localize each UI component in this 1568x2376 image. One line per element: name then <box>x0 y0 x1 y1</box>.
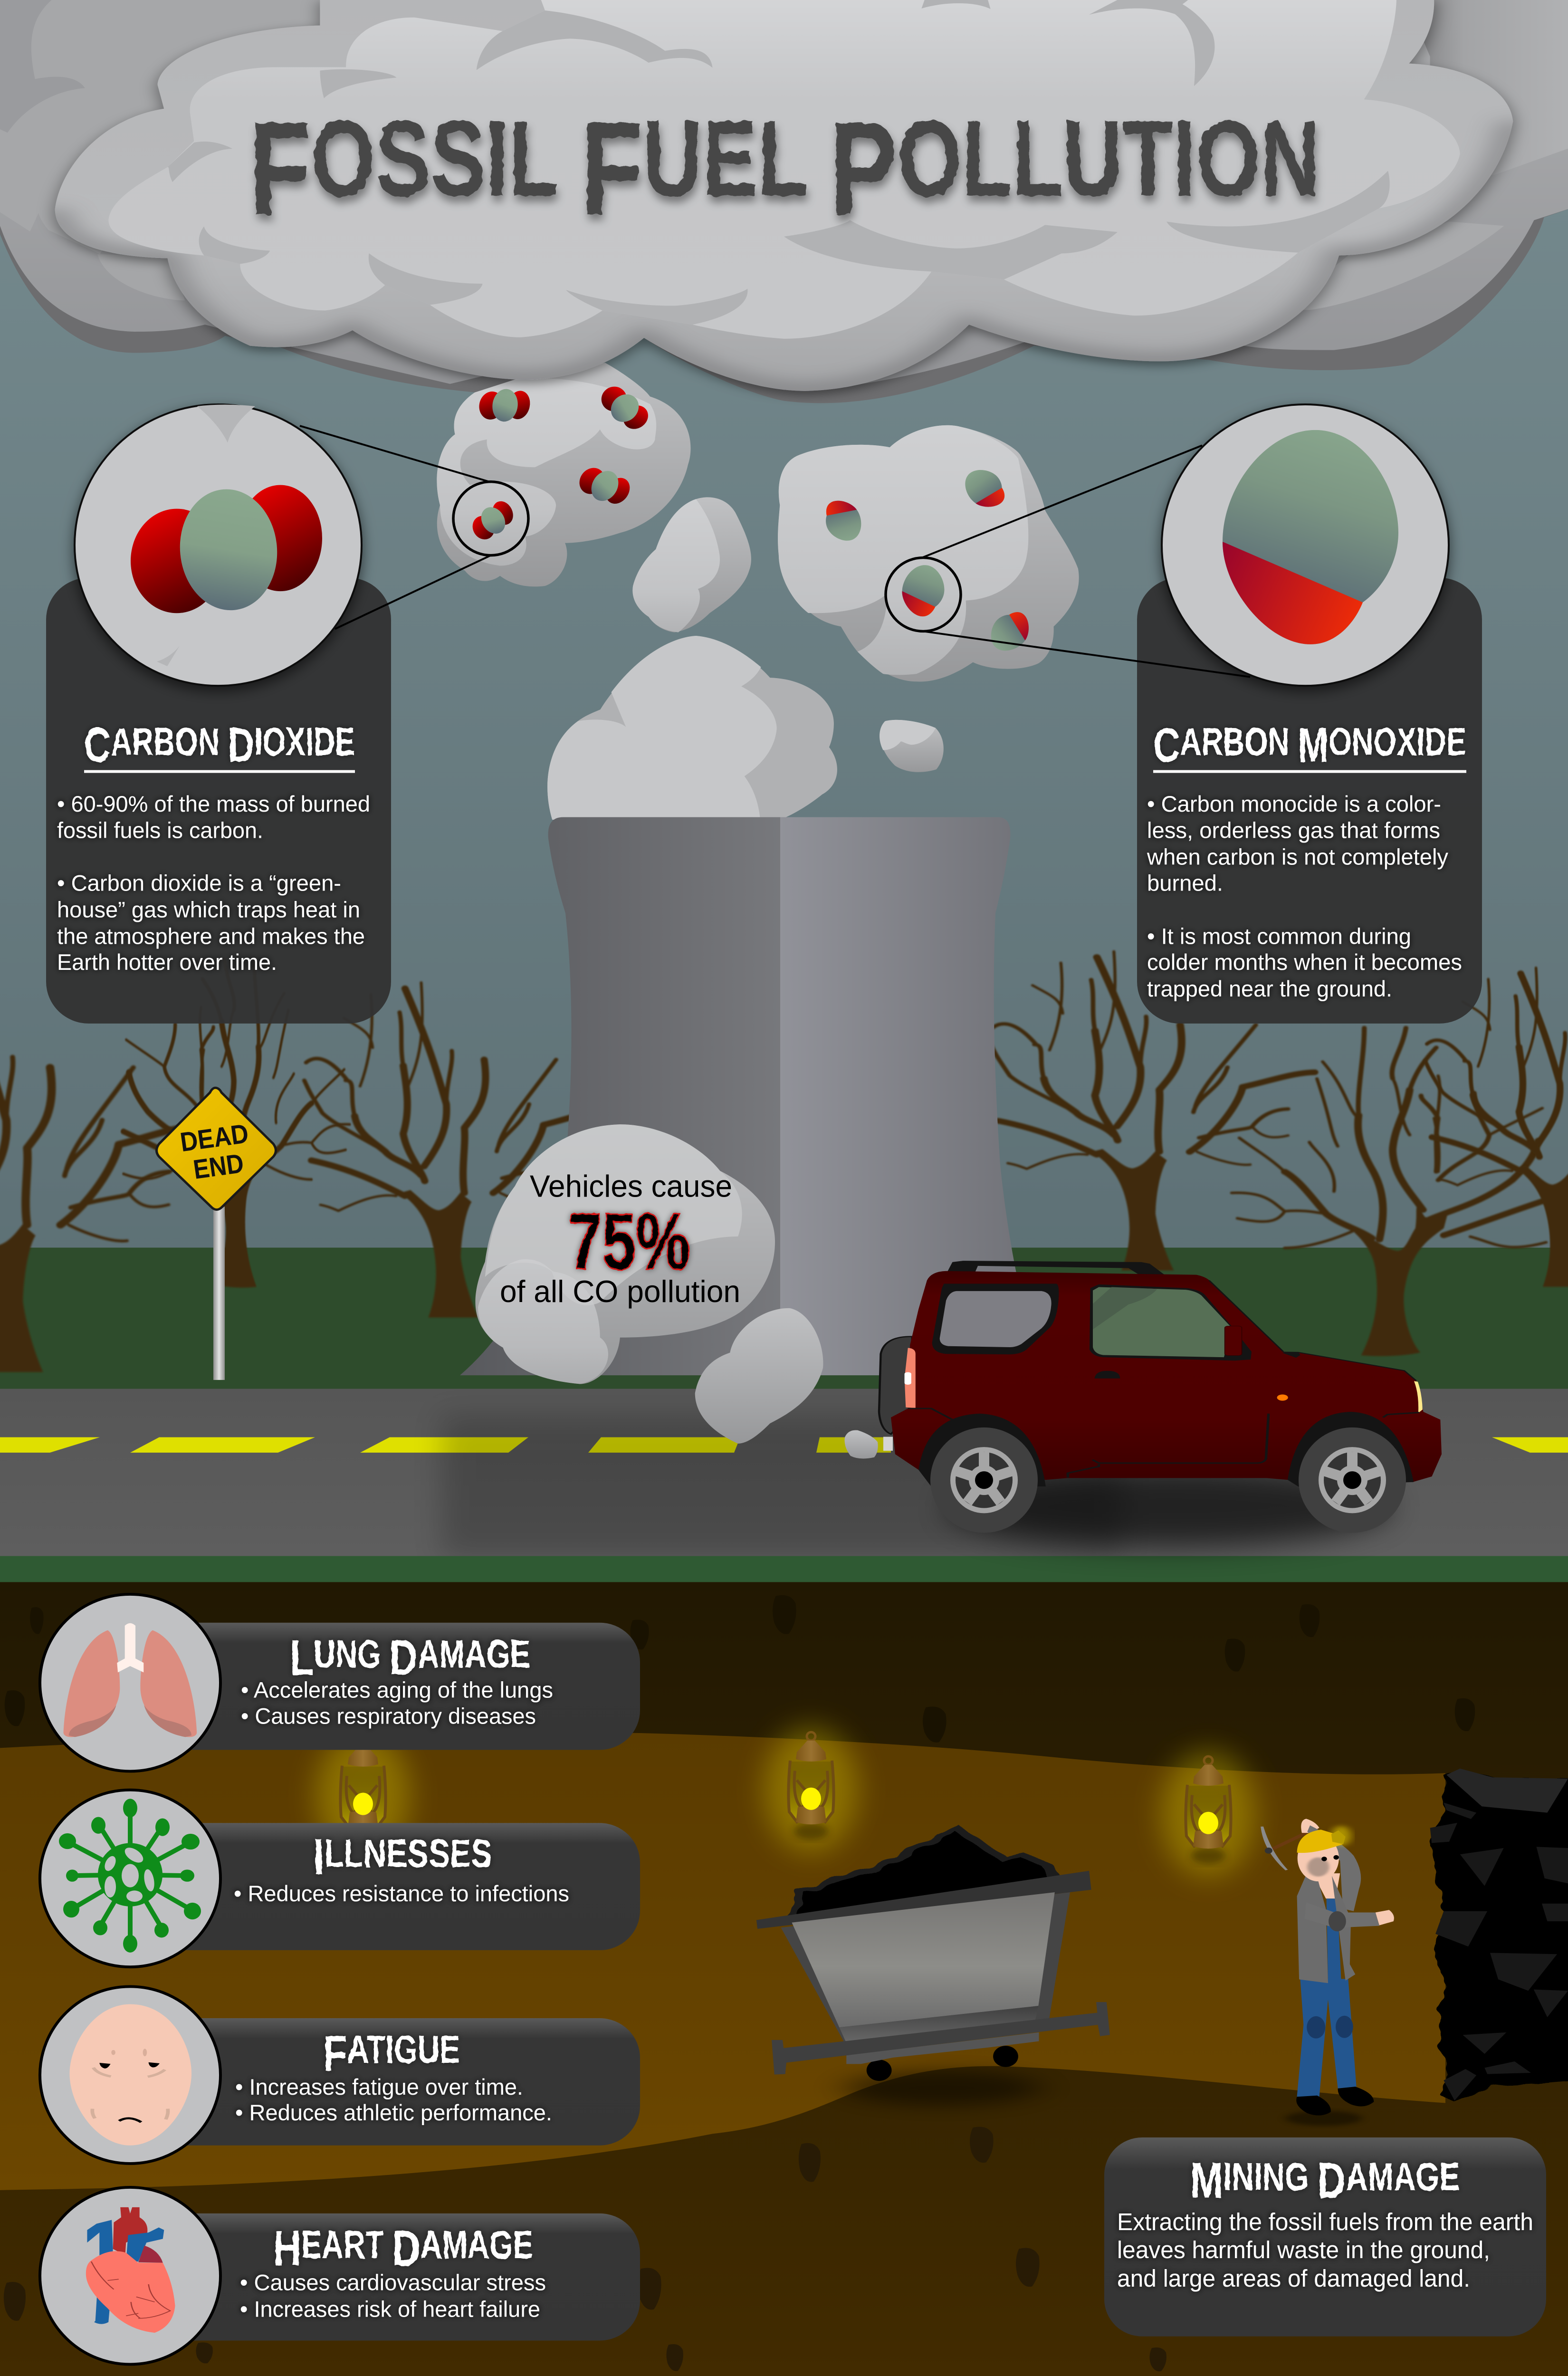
tree right of tower <box>991 951 1315 1271</box>
carbon monoxide text: less, orderless gas that forms <box>1147 818 1440 843</box>
panel: heart damage <box>143 2213 640 2340</box>
front cloud light face <box>108 0 1460 339</box>
title: P <box>830 95 898 242</box>
cooling tower <box>460 817 1043 1375</box>
heading: illnesses: LLNESSES <box>325 1831 492 1875</box>
lit patch lower left <box>97 254 185 301</box>
carbon dioxide text <box>57 792 370 975</box>
carbon dioxide text: Earth hotter over time. <box>57 950 277 975</box>
fatigue bullets: • Increases fatigue over time. <box>235 2075 523 2100</box>
lamp glow <box>1331 1826 1351 1846</box>
mining damage text <box>1117 2208 1533 2292</box>
carbon monoxide text: • Carbon monocide is a color- <box>1147 792 1441 817</box>
cart floor <box>839 2006 1038 2043</box>
heading: mining damage: D <box>1317 2152 1346 2208</box>
fatigue bullets <box>235 2075 552 2126</box>
exhaust pipe <box>883 1437 893 1451</box>
head <box>1298 1835 1339 1881</box>
heart damage bullets: • Causes cardiovascular stress <box>240 2271 546 2295</box>
fatigue bullets: • Reduces athletic performance. <box>235 2100 552 2126</box>
callout smoke puff <box>475 1124 775 1384</box>
carbon monoxide text: when carbon is not completely <box>1147 845 1448 870</box>
sky background <box>0 0 1568 1258</box>
lantern middle <box>764 1726 859 1852</box>
icon circle: lungs <box>40 1594 220 1771</box>
under frame <box>846 2032 1039 2064</box>
icon circle: tired face <box>40 1986 220 2164</box>
car body group <box>879 1261 1442 1486</box>
grass verge <box>0 1556 1568 1582</box>
circle: carbon dioxide molecule <box>75 404 362 686</box>
exhaust puff <box>845 1430 878 1458</box>
hard hat <box>1297 1830 1343 1853</box>
axle <box>772 2002 1110 2075</box>
carbon monoxide text: • It is most common during <box>1147 924 1411 949</box>
cart interior <box>792 1892 1055 2027</box>
helmet lamp <box>1331 1830 1346 1844</box>
heading: carbon monoxide: C <box>1153 718 1180 772</box>
heading: heart damage: AMAGE <box>421 2223 533 2267</box>
neck <box>1313 1873 1340 1898</box>
lanterns <box>316 1726 1256 1877</box>
orange marker <box>1277 1394 1288 1401</box>
heading: heart damage: EART <box>301 2223 392 2267</box>
heading: fatigue: F <box>323 2025 347 2081</box>
rocks in earth <box>5 1595 1475 1743</box>
underground earth <box>0 1582 1568 2376</box>
rear window <box>940 1291 1052 1347</box>
title: F <box>249 95 311 242</box>
back cloud rim <box>0 0 1568 403</box>
smoke puffs with molecules <box>437 363 1079 772</box>
sign board <box>157 1088 276 1210</box>
mine wall <box>0 1733 1445 2190</box>
heading: mining damage: M <box>1190 2152 1223 2208</box>
heading: carbon monoxide: ONOXIDE <box>1329 720 1466 764</box>
heading: heart damage: D <box>392 2220 421 2276</box>
pickaxe <box>1262 1827 1306 1870</box>
heading: lung damage: UNG <box>314 1632 389 1676</box>
carbon dioxide molecules in smoke <box>467 378 653 543</box>
heading: heart damage: H <box>273 2220 301 2276</box>
miner shadow <box>1285 2111 1362 2126</box>
drifting and carbon monoxide puffs <box>632 425 1079 772</box>
carbon monoxide text: trapped near the ground. <box>1147 977 1392 1002</box>
panel: fatigue <box>143 2018 640 2146</box>
cloud shading creases <box>168 0 1390 325</box>
middle cloud layer <box>0 0 1568 390</box>
dead end sign <box>157 1088 276 1380</box>
front wheel <box>1299 1428 1406 1533</box>
heading: carbon dioxide: C <box>84 718 111 772</box>
legs <box>1297 1979 1357 2097</box>
sign text <box>178 1119 255 1186</box>
grass field <box>0 1247 1568 1397</box>
heading: carbon monoxide: ARBON <box>1180 720 1298 764</box>
coal load <box>792 1827 1058 1919</box>
heading: mining damage: AMAGE <box>1346 2155 1460 2199</box>
lit patch lower right <box>1280 221 1504 310</box>
knee stains <box>1307 2016 1325 2039</box>
heading underline <box>84 770 355 773</box>
carbon dioxide text: fossil fuels is carbon. <box>57 818 263 843</box>
carbon monoxide text: burned. <box>1147 871 1223 896</box>
callout: vehicles cause 75% <box>475 1124 775 1384</box>
heading: mining damage: INING <box>1223 2155 1317 2199</box>
car shadow <box>946 1467 1392 1547</box>
sign text: DEAD <box>178 1119 250 1158</box>
lantern right <box>1161 1751 1256 1877</box>
heading: carbon dioxide: ARBON <box>111 720 228 764</box>
panel: lung damage <box>143 1623 640 1750</box>
heading: lung damage: AMAGE <box>418 1632 530 1676</box>
wheel arches <box>918 1412 1414 1486</box>
door seams <box>908 1408 1419 1477</box>
icon: lungs <box>64 1623 197 1737</box>
heading underline <box>1153 770 1466 773</box>
panel: carbon monoxide <box>1137 578 1482 1024</box>
tail light highlight <box>905 1372 911 1385</box>
raised hand <box>1301 1819 1319 1833</box>
side mirror <box>1225 1326 1242 1355</box>
heading: illnesses: I <box>313 1829 325 1885</box>
title: OSSIL <box>311 98 581 219</box>
tree far left <box>0 977 198 1372</box>
heading: fatigue: ATIGUE <box>347 2028 460 2071</box>
carbon dioxide text: the atmosphere and makes the <box>57 924 365 949</box>
tree behind car <box>1232 1028 1546 1356</box>
lantern left <box>316 1732 411 1858</box>
heading: carbon dioxide: IOXIDE <box>254 720 355 764</box>
door handle <box>1095 1371 1120 1379</box>
carbon monoxide text: colder months when it becomes <box>1147 950 1462 975</box>
bare trees <box>0 951 1568 1372</box>
illnesses bullet: • Reduces resistance to infections <box>234 1881 569 1907</box>
lung damage bullets: • Causes respiratory diseases <box>241 1704 536 1729</box>
icon: CO2 molecule <box>131 485 322 614</box>
cart shell <box>781 1892 1070 2046</box>
magnifier lines: carbon monoxide <box>886 445 1250 677</box>
circle: carbon monoxide molecule <box>1162 404 1449 686</box>
carbon monoxide molecules in smoke <box>812 458 1042 663</box>
miner <box>1262 1819 1394 2126</box>
big number: 75% <box>568 1197 690 1286</box>
title: OLLUTION <box>898 98 1320 219</box>
window reflection <box>1093 1287 1157 1330</box>
callout text: Vehicles cause <box>530 1169 732 1203</box>
icon circle: virus <box>40 1790 220 1967</box>
sign text: END <box>191 1148 246 1185</box>
face dirt <box>1307 1858 1329 1877</box>
title: UEL <box>643 98 830 219</box>
carbon dioxide text: house” gas which traps heat in <box>57 898 360 922</box>
carbon dioxide text: • Carbon dioxide is a “green- <box>57 871 341 896</box>
heading: lung damage: L <box>290 1629 314 1686</box>
headlight <box>1414 1381 1423 1413</box>
front window frame <box>1090 1284 1252 1360</box>
panel: illnesses <box>143 1823 640 1950</box>
front cloud edge shading <box>55 121 1513 391</box>
icon: heart <box>86 2207 175 2333</box>
cart rim <box>756 1871 1091 1929</box>
rear window frame <box>932 1284 1059 1354</box>
icon: face <box>69 2004 191 2146</box>
heading: carbon monoxide: M <box>1298 718 1329 772</box>
raised arm <box>1307 1825 1361 1911</box>
roof rack <box>947 1261 1165 1275</box>
lung damage bullets <box>241 1678 553 1729</box>
front window <box>1093 1287 1231 1357</box>
icon circle: heart <box>40 2187 220 2364</box>
cart shadow <box>844 2070 1040 2106</box>
jacket stain <box>1329 1911 1346 1931</box>
heading: carbon dioxide: D <box>228 718 254 772</box>
lung damage bullets: • Accelerates aging of the lungs <box>241 1678 553 1703</box>
title: F <box>581 95 643 242</box>
carbon dioxide puff <box>437 363 691 586</box>
car body <box>891 1271 1442 1482</box>
upper right cloud mass <box>1405 0 1568 175</box>
magnifier lines: carbon dioxide <box>300 426 528 629</box>
rear wheel <box>930 1428 1038 1533</box>
eyes <box>1321 1857 1327 1861</box>
road <box>0 1389 1568 1556</box>
tree behind sign <box>124 959 350 1288</box>
boots <box>1296 2087 1374 2116</box>
mine cart <box>756 1827 1110 2106</box>
heart damage bullets: • Increases risk of heart failure <box>240 2297 540 2322</box>
upper left cloud mass <box>0 0 350 254</box>
panel: mining damage <box>1104 2137 1546 2337</box>
heart damage bullets <box>240 2271 546 2322</box>
tree left of tower <box>304 983 612 1318</box>
mining damage text: Extracting the fossil fuels from the earth <box>1117 2208 1533 2235</box>
lane dashes <box>0 1437 1568 1453</box>
rocks in lower earth <box>4 2127 1166 2371</box>
overalls bib <box>1327 1898 1341 1983</box>
storm cloud <box>0 0 1568 403</box>
tree far right <box>1425 968 1568 1287</box>
extended hand <box>1376 1910 1394 1926</box>
carbon monoxide text <box>1147 792 1462 1002</box>
heading: lung damage: D <box>389 1629 418 1686</box>
roadside exhaust puff <box>695 1308 823 1444</box>
carbon dioxide text: • 60-90% of the mass of burned <box>57 792 370 817</box>
coal facets <box>1430 1769 1568 2100</box>
tail light <box>905 1348 916 1408</box>
sign pole <box>213 1207 225 1380</box>
smoke above tower <box>547 636 837 820</box>
icon: virus <box>59 1799 201 1953</box>
icon: CO molecule <box>1206 416 1415 658</box>
wiper base <box>1282 1352 1300 1358</box>
hood edge <box>1209 1280 1416 1380</box>
back wheels <box>993 2046 1018 2067</box>
coal seam <box>1430 1769 1568 2102</box>
callout text line 2: of all CO pollution <box>500 1274 740 1309</box>
red suv <box>845 1261 1442 1533</box>
jacket <box>1297 1875 1355 1983</box>
extended arm <box>1305 1902 1379 1928</box>
front cloud body <box>55 0 1513 391</box>
spare wheel <box>879 1337 912 1434</box>
panel: carbon dioxide <box>46 578 391 1024</box>
upper left dark lobe <box>0 0 85 133</box>
mining damage text: leaves harmful waste in the ground, <box>1117 2236 1490 2263</box>
mining damage text: and large areas of damaged land. <box>1117 2264 1470 2292</box>
